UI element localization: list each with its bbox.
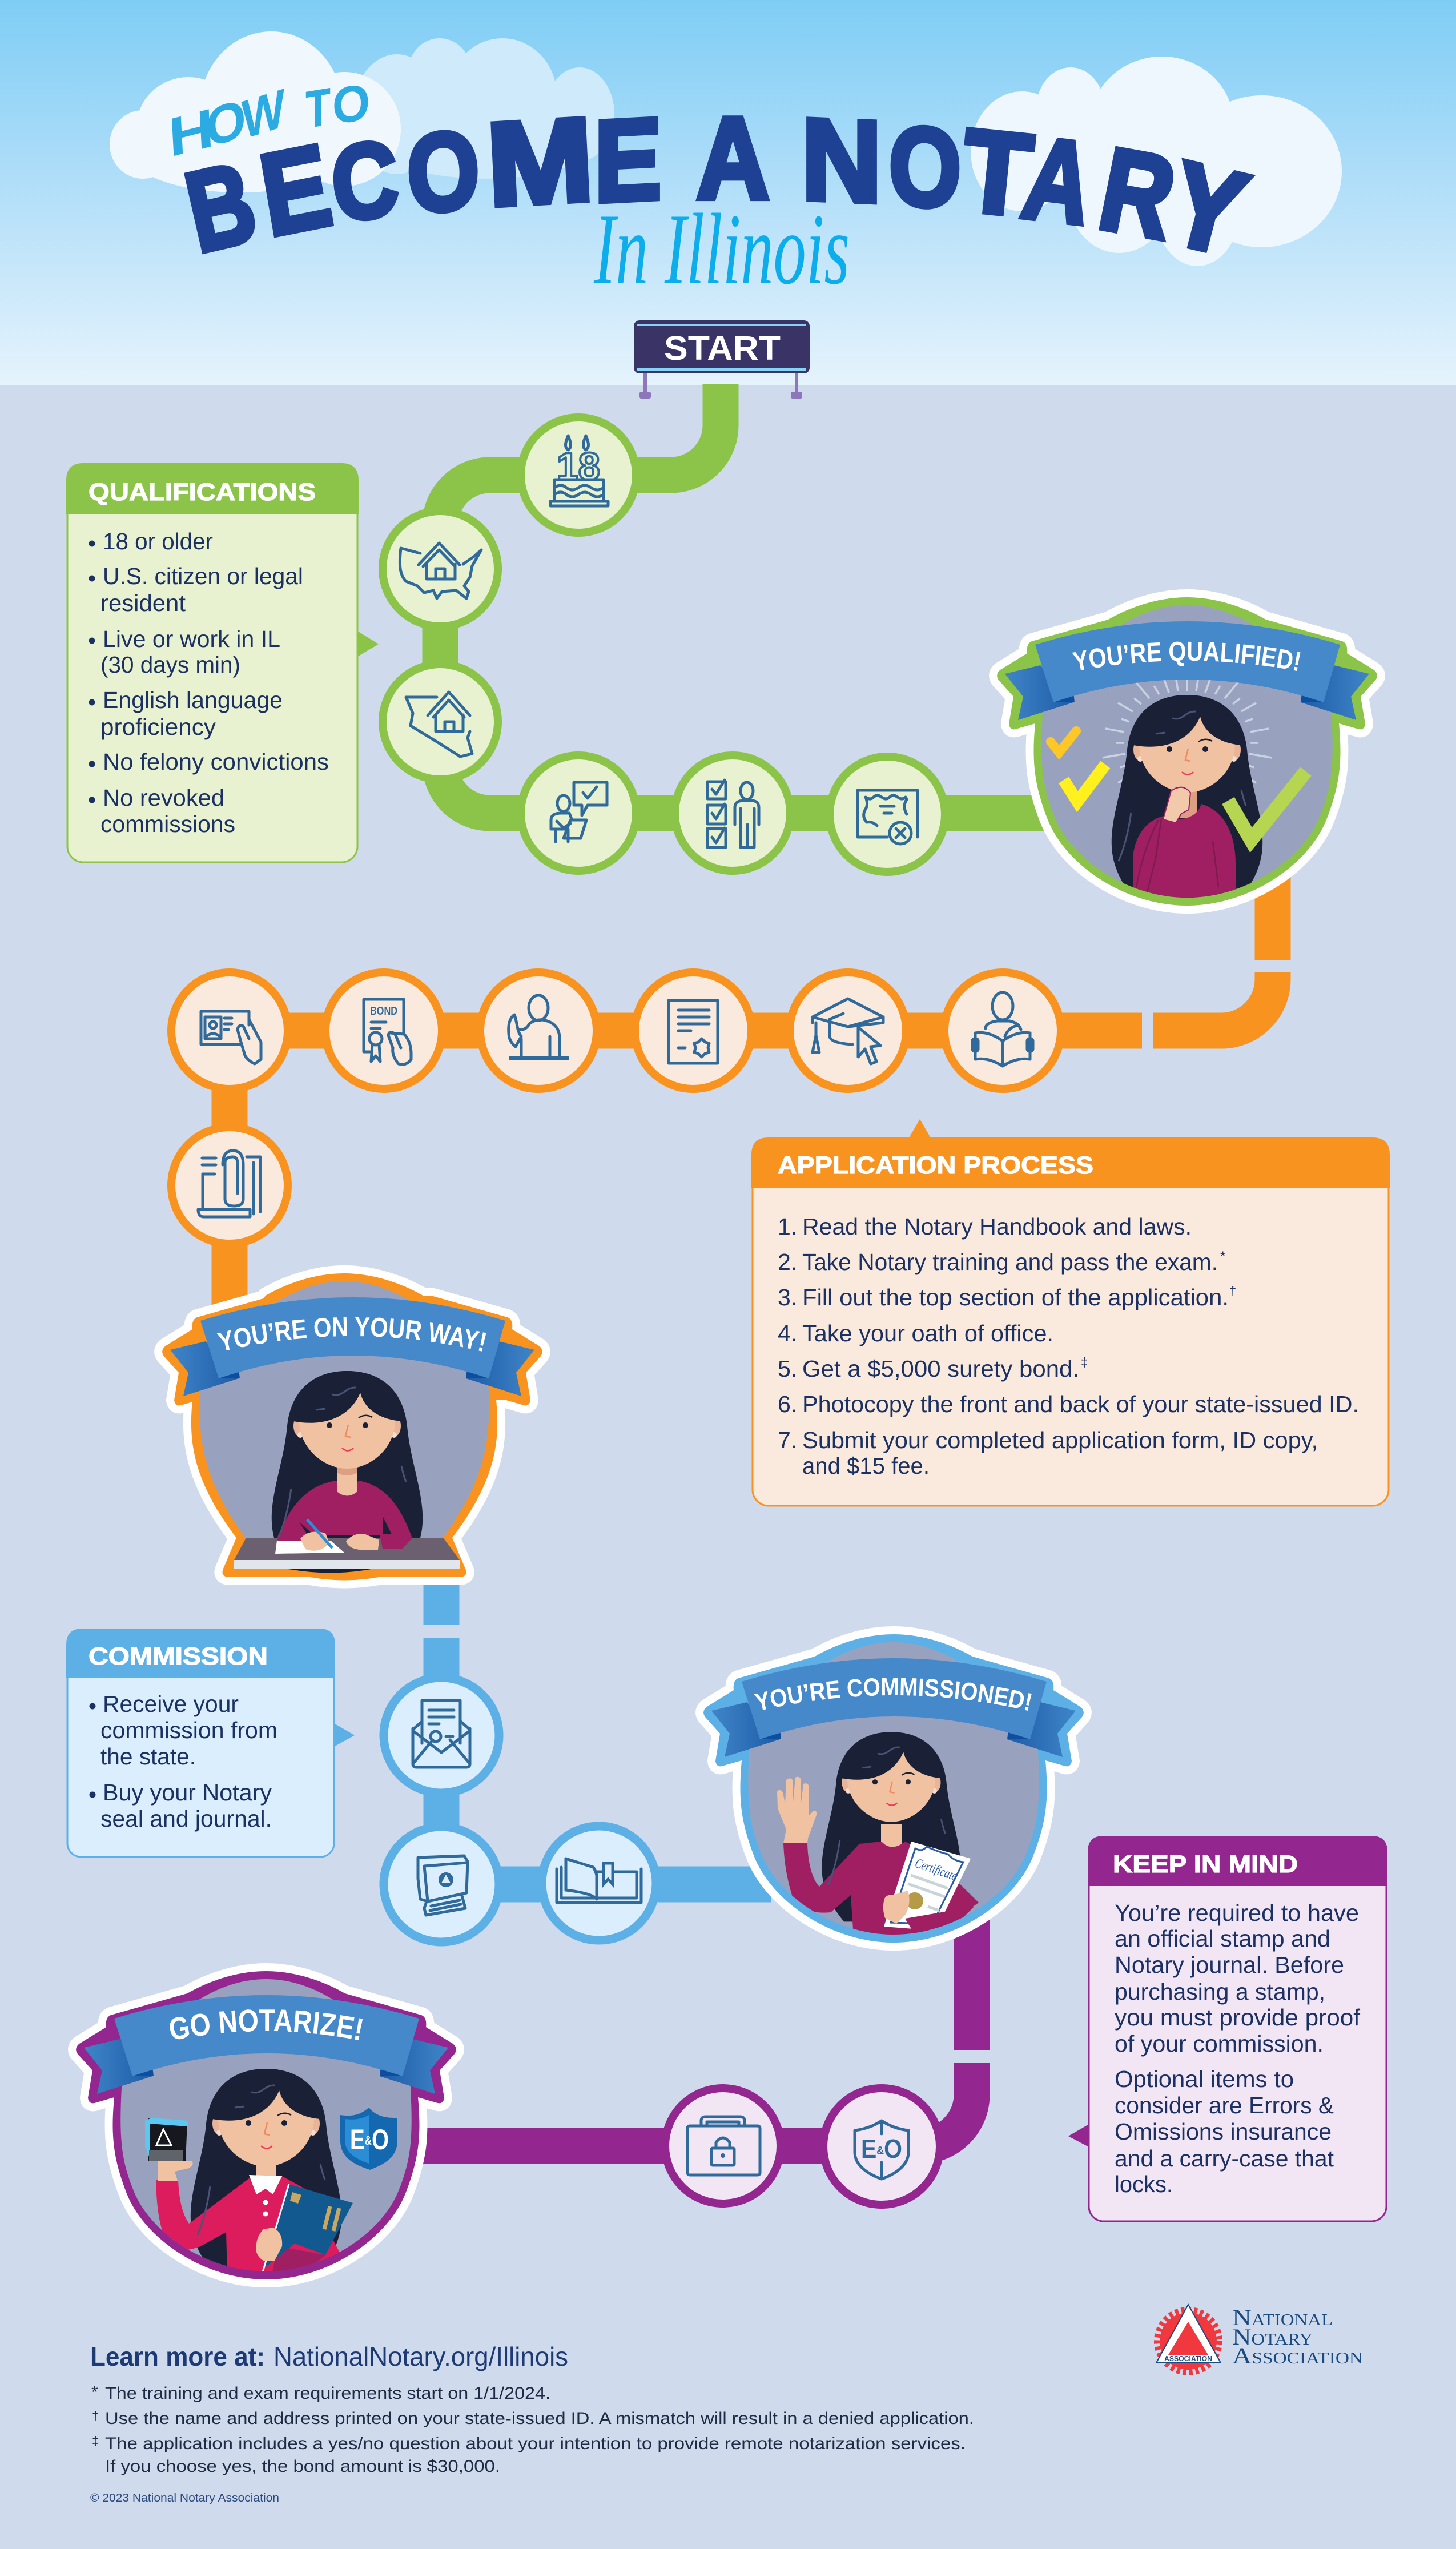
blue road [441,1565,771,1884]
title: become a notary: A [697,94,769,223]
panel header [66,1629,335,1678]
title: become a notary: N [802,94,882,227]
list: proficiency [100,714,216,740]
badge: go notarize: O [372,2124,389,2156]
cloud: center back [352,38,614,179]
list [89,1691,277,1832]
numbered list [778,1213,1359,1479]
panel heading: COMMISSION [89,1643,268,1670]
title: how to: W [240,77,287,151]
icon: E&O shield: O [884,2134,902,2164]
title: how to: T [305,76,331,140]
numbered list: and $15 fee. [802,1453,930,1479]
icon: graduation cap and cursor [790,972,906,1089]
footnotes: The training and exam requirements start on 1/1/2024. [105,2384,550,2403]
logo: national notary association: Association [1232,2343,1363,2369]
numbered list: † [1229,1284,1236,1298]
panel body [67,1630,334,1857]
badge: you're commissioned: YOU’RE COMMISSIONED! [754,1678,1032,1711]
icon: notary stamp [384,1827,499,1942]
list: commission from [100,1717,277,1743]
start sign: START [664,329,781,367]
icon: envelope with commission [384,1678,499,1793]
panel pointer [1068,2124,1089,2147]
body text [1115,1900,1361,2197]
list [89,528,329,837]
numbered list: Read the Notary Handbook and laws. [802,1213,1192,1240]
panel body [1089,1837,1386,2221]
icon: birthday cake 18 [521,417,636,533]
numbered list: Submit your completed application form, ID copy, [802,1427,1318,1453]
title: become a notary: M [484,94,596,231]
list: U.S. citizen or legal [103,563,303,589]
panel heading: QUALIFICATIONS [89,479,316,506]
cloud: left [110,31,401,192]
logo: national notary association [1156,2305,1363,2372]
icon: E&O shield: E [861,2134,879,2164]
panel: keep in mind [1068,1836,1387,2221]
panel pointer [357,631,379,657]
title: become a notary: O [405,107,482,236]
footnotes: ‡ [92,2434,99,2448]
badge: go notarize: GO NOTARIZE! [170,2009,363,2040]
numbered list: * [1220,1249,1225,1264]
list: (30 days min) [100,652,240,678]
sky header [0,0,1456,385]
body text: Optional items to [1115,2066,1294,2092]
icon: USA map with house [383,511,498,626]
numbered list: ‡ [1081,1355,1088,1369]
list: seal and journal. [100,1806,272,1832]
numbered list: 4. [778,1320,797,1346]
body text: Notary journal. Before [1115,1952,1344,1978]
icon: E&O shield: & [876,2145,884,2157]
title: become a notary: E [252,120,339,260]
panel pointer [908,1119,932,1140]
icon: open journal [542,1826,656,1940]
title: become a notary: C [327,118,402,244]
icon: person with speech bubble check [521,755,636,871]
icon: sealed document [635,972,751,1089]
list: the state. [100,1743,196,1770]
badge: go notarize: E [350,2124,369,2156]
list: No revoked [103,785,224,811]
icon: locked carry case [665,2088,781,2204]
learn more line [90,2342,568,2371]
panel heading: KEEP IN MIND [1113,1851,1298,1878]
purple road [423,1901,972,2146]
numbered list: Fill out the top section of the application. [802,1284,1229,1310]
body text: locks. [1115,2171,1173,2197]
list: resident [100,590,186,616]
copyright: © 2023 National Notary Association [90,2492,279,2504]
badge: you're on your way [154,1265,550,1589]
icon: checklist and person [675,755,790,871]
logo: national notary association: National [1232,2305,1333,2330]
panel header [751,1137,1390,1188]
panel heading: APPLICATION PROCESS [778,1152,1093,1179]
badge: you're commissioned: Certificate [913,1856,959,1884]
footnotes: Use the name and address printed on your state-issued ID. A mismatch will result in a denied application. [105,2409,974,2428]
body text: Omissions insurance [1115,2118,1332,2145]
icon: Illinois map with house [383,664,498,779]
title: become a notary: A [1015,113,1103,248]
logo: national notary association: Notary [1232,2324,1313,2350]
logo: national notary association: ASSOCIATION [1164,2354,1212,2363]
body text: an official stamp and [1115,1925,1330,1952]
badge: you're qualified [989,589,1385,914]
subtitle: in illinois: In Illinois [593,192,850,305]
badge: you're commissioned [695,1626,1092,1951]
title: how to: O [204,87,247,159]
body text: of your commission. [1115,2031,1324,2057]
title: become a notary: B [175,138,266,276]
footnotes: * [91,2383,98,2402]
panel body [67,464,357,862]
title: become a notary: O [888,103,962,232]
icon: birthday cake 18: 18 [557,445,600,488]
icon: certificate with x [830,757,945,872]
numbered list: 5. [778,1356,797,1382]
green road [440,384,1051,813]
list: English language [103,687,283,713]
list: Receive your [103,1691,239,1717]
panel header [1088,1836,1387,1886]
body text: You’re required to have [1115,1900,1359,1926]
orange road [230,845,1273,1308]
panel: commission [66,1629,355,1857]
title: become a notary: R [1090,123,1185,263]
panel: qualifications [66,463,379,862]
numbered list: 7. [778,1427,797,1453]
body text: you must provide proof [1115,2004,1361,2031]
numbered list: Get a $5,000 surety bond. [802,1356,1079,1382]
body text: and a carry-case that [1115,2145,1334,2172]
start sign [634,320,810,399]
badge: go notarize: & [365,2133,372,2148]
list: commissions [100,811,235,837]
badge: you're on your way: YOU’RE ON YOUR WAY! [217,1317,486,1352]
body text: purchasing a stamp, [1115,1979,1325,2005]
panel pointer [334,1723,355,1747]
list: No felony convictions [103,749,329,775]
icon: ID card and hand [171,972,288,1089]
list: Live or work in IL [103,626,280,652]
numbered list: Take your oath of office. [802,1320,1053,1346]
footnotes [91,2383,974,2476]
icon: person reading book [944,972,1061,1089]
icon: person raising hand [480,972,597,1089]
title: become a notary [175,94,1258,280]
title: become a notary: E [594,94,661,227]
badge: go notarize [68,1963,464,2287]
numbered list: Photocopy the front and back of your state-issued ID. [802,1391,1359,1417]
panel body [753,1139,1389,1506]
list: Buy your Notary [103,1779,272,1806]
icon: E&O shield [823,2088,940,2205]
panel header [66,463,359,514]
icon: paper clip documents [171,1127,288,1244]
title: become a notary: Y [1157,136,1258,280]
numbered list: 2. [778,1249,797,1275]
panel: application process [751,1119,1390,1506]
list: 18 or older [103,528,213,554]
footnotes: The application includes a yes/no question about your intention to provide remote notarization services. [105,2434,966,2453]
learn more line: NationalNotary.org/Illinois [273,2342,568,2371]
numbered list: 1. [778,1213,797,1240]
title: become a notary: T [957,105,1037,241]
title: how to: H [167,97,216,169]
numbered list: 6. [778,1391,797,1417]
footnotes: If you choose yes, the bond amount is $30,000. [105,2457,500,2476]
icon: bond document [325,972,442,1089]
title: how to [167,73,370,169]
badge: you're qualified: YOU’RE QUALIFIED! [1072,642,1301,671]
cloud: right [971,57,1342,266]
numbered list: 3. [778,1284,797,1310]
learn more line: Learn more at: [90,2342,265,2371]
icon: bond document: BOND [370,1005,397,1018]
footnotes: † [92,2409,99,2423]
body text: consider are Errors & [1115,2092,1334,2118]
title: how to: O [332,73,370,135]
numbered list: Take Notary training and pass the exam. [802,1249,1218,1275]
